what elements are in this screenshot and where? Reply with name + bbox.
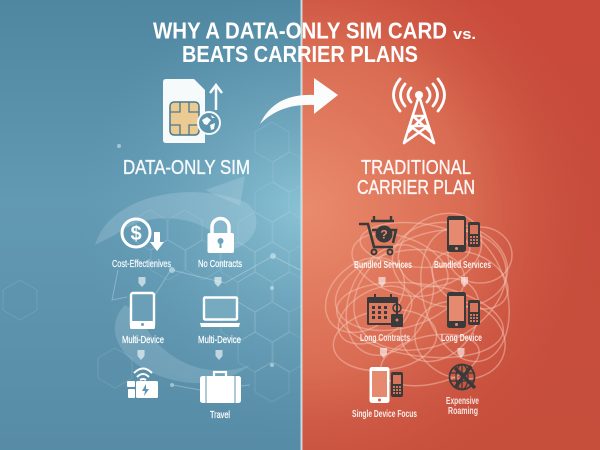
item: bundled services phones: [434, 216, 491, 271]
item: expensive roaming: Roaming: [448, 405, 478, 417]
item: travel: Travel: [210, 409, 230, 421]
title: [153, 18, 476, 67]
item: long device: Long Device: [441, 332, 482, 344]
icon: tablet: [130, 293, 155, 329]
item: multi-device laptop: [198, 298, 241, 346]
item: long device: [441, 292, 482, 344]
item: bundled services phones: Bundled Services: [434, 259, 491, 271]
panel: data-only SIM background: [0, 0, 307, 450]
icon: cell tower: [394, 79, 444, 143]
item: single device focus: [352, 367, 417, 420]
title: BEATS CARRIER PLANS: [182, 41, 418, 67]
item: single device focus: Single Device Focus: [352, 408, 417, 420]
item: multi-device tablet: Multi-Device: [122, 334, 164, 346]
icon: globe: [198, 112, 220, 134]
icon: shopping cart with question mark: ?: [380, 228, 388, 242]
icon: white smartphone and mobile phone: [370, 367, 403, 403]
item: multi-device tablet: [122, 293, 164, 346]
item: cost-effectiveness: Cost-Effectienives: [112, 259, 171, 270]
arrow: curved arrow from SIM to carrier: [260, 78, 338, 124]
item: travel: [200, 372, 241, 421]
title: vs.: [453, 26, 476, 43]
item: expensive roaming: Expensive: [446, 395, 479, 407]
icon: smartphone and mobile phone: [447, 216, 480, 252]
item: no contracts: No Contracts: [198, 258, 242, 270]
icon: dollar with down arrow: $: [130, 223, 142, 245]
icon: suitcase: [200, 372, 241, 403]
icon: smartphone and mobile phone: [447, 292, 480, 328]
item: long contracts: Long Contracts: [360, 332, 410, 344]
icon: wifi battery device: [127, 368, 158, 398]
icon: calendar with padlock: [367, 294, 403, 327]
icon: padlock: [208, 218, 234, 253]
item: cost-effectiveness: [112, 219, 171, 270]
arrows: right column connectors: [378, 277, 468, 358]
item: bundled services cart: Bundled Services: [354, 259, 412, 271]
heading: traditional carrier plan: TRADITIONAL: [361, 157, 471, 179]
icon: SIM card with upload arrow and globe: [163, 79, 222, 143]
title: WHY A DATA-ONLY SIM CARD: [153, 18, 447, 44]
heading: data-only SIM: DATA-ONLY SIM: [123, 157, 250, 179]
item: bundled services cart: [354, 216, 412, 271]
item: no contracts: [198, 218, 242, 270]
icon: laptop: [200, 298, 240, 327]
panel: traditional carrier plan background: [302, 0, 600, 450]
item: expensive roaming: [446, 364, 479, 417]
arrows: left column connectors: [138, 277, 222, 360]
item: long contracts: [360, 294, 410, 344]
heading: traditional carrier plan: CARRIER PLAN: [357, 177, 475, 199]
center divider: [300, 0, 302, 450]
item: multi-device laptop: Multi-Device: [198, 334, 241, 346]
heading: traditional carrier plan: [357, 157, 475, 199]
icon: globe crossed out: [450, 364, 475, 390]
